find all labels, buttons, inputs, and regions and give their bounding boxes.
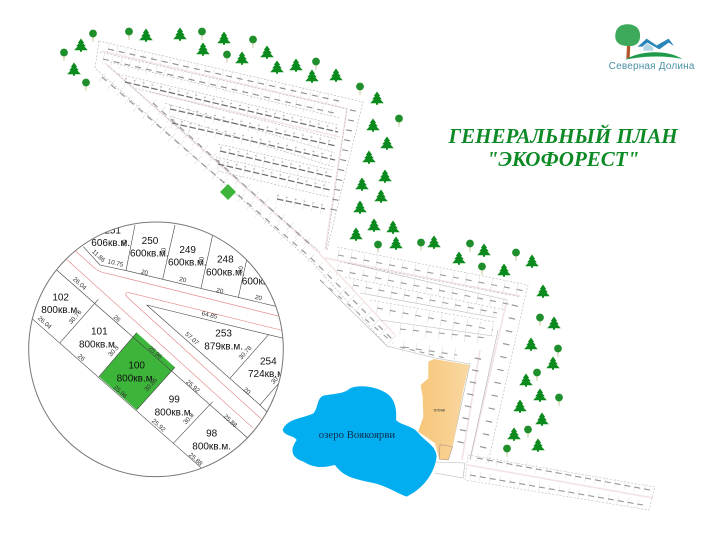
lot labels: 800кв.м. — [155, 408, 193, 419]
lot labels — [41, 225, 284, 453]
lot labels: 251 — [104, 225, 121, 236]
lot labels: 101 — [91, 326, 108, 337]
dimension labels: 30 — [160, 247, 168, 255]
trees: spruces — [67, 28, 561, 452]
dimension labels: 30.78 — [238, 344, 254, 361]
dimension labels: 20 — [242, 386, 252, 396]
lake label: озеро Воякоярви — [319, 429, 395, 441]
dimension labels: 20 — [178, 276, 187, 285]
lot divisions — [337, 255, 525, 355]
dimension labels: 25.88 — [222, 413, 239, 429]
dimension labels: 30.8 — [182, 412, 196, 426]
lot labels: 250 — [142, 236, 159, 247]
lot labels: 606кв.м. — [91, 238, 130, 249]
road lines — [67, 251, 283, 428]
lot labels: 600кв — [242, 277, 268, 288]
dimension labels: 57.07 — [183, 331, 200, 347]
lot divisions — [125, 82, 338, 209]
highlighted lot 100 — [220, 184, 236, 200]
inset: zoomed lot detail — [29, 222, 284, 477]
dimension labels: 25.96 — [112, 384, 129, 400]
lot labels: 99 — [169, 395, 180, 406]
east columns of lots — [483, 305, 515, 448]
lot labels — [337, 255, 525, 355]
site plan: north triangular section — [95, 41, 395, 347]
dimension labels: 26 — [76, 353, 86, 363]
site plan: south-east section — [320, 247, 528, 478]
dimension labels: 64.85 — [201, 310, 218, 321]
lot outline — [95, 41, 388, 347]
lot labels: 253 — [215, 329, 232, 340]
dimension labels: 20 — [215, 287, 224, 296]
lot boundaries — [32, 225, 283, 472]
east column of lots — [332, 110, 353, 217]
trees: round — [60, 28, 563, 457]
lake — [283, 386, 437, 497]
beach: пляж — [433, 408, 446, 414]
lot labels: 248 — [217, 255, 234, 266]
lot labels — [125, 82, 338, 209]
dimension labels: 25.92 — [184, 379, 201, 395]
logo hill — [625, 52, 682, 60]
lot labels: 879кв.м. — [204, 342, 243, 353]
lot labels: 724кв.м — [248, 369, 284, 380]
lot labels: 800кв.м. — [117, 373, 155, 384]
dimension labels: 20 — [254, 294, 263, 303]
lot labels: 600кв.м. — [206, 267, 245, 278]
lot labels: 254 — [260, 356, 277, 367]
highlighted lot 100 — [99, 333, 175, 410]
beach — [418, 359, 469, 460]
dimension labels: 25.96 — [147, 345, 164, 361]
dimension labels: 25.92 — [150, 418, 167, 434]
dimension labels: 11.86 — [90, 248, 107, 264]
dimension labels — [36, 239, 280, 468]
dimension labels: 30.76 — [68, 309, 84, 326]
internal roads — [102, 51, 395, 335]
dimension labels: 30.5 — [107, 344, 121, 358]
lot labels: 800кв.м. — [192, 442, 231, 453]
logo: Северная Долина — [609, 24, 695, 72]
dimension labels: 26 — [112, 314, 122, 324]
dimension labels: 30 — [198, 256, 206, 264]
dimension labels: 26.04 — [71, 276, 88, 292]
dimension labels: 30.85 — [143, 376, 159, 393]
lot dimension ticks — [125, 78, 338, 206]
site plan: southern strip — [465, 455, 655, 510]
title: "ЭКОФОРЕСТ" — [487, 147, 639, 171]
dimension labels: 30 — [270, 375, 280, 386]
dimension labels: 26.04 — [36, 315, 53, 331]
lot labels: 800кв.м. — [41, 305, 80, 316]
lot labels: 100 — [128, 360, 145, 371]
logo name: Северная Долина — [609, 61, 695, 72]
title: ГЕНЕРАЛЬНЫЙ ПЛАН — [447, 124, 678, 148]
lot labels: 600кв.м. — [130, 249, 169, 260]
dimension labels: 10.75 — [107, 258, 124, 269]
dimension labels: 30 — [237, 265, 245, 274]
logo house — [638, 39, 674, 51]
dimension labels: 30 — [121, 239, 129, 247]
dimension labels: 20 — [140, 269, 149, 277]
lot labels: 800кв.м. — [79, 339, 118, 350]
lot labels: 249 — [179, 245, 196, 256]
logo tree — [615, 24, 640, 58]
title — [447, 124, 678, 171]
dimension labels: 25.88 — [187, 452, 204, 468]
lot labels: 102 — [52, 292, 69, 303]
lot labels: 600кв.м. — [168, 258, 207, 269]
lot labels: 98 — [206, 429, 218, 440]
